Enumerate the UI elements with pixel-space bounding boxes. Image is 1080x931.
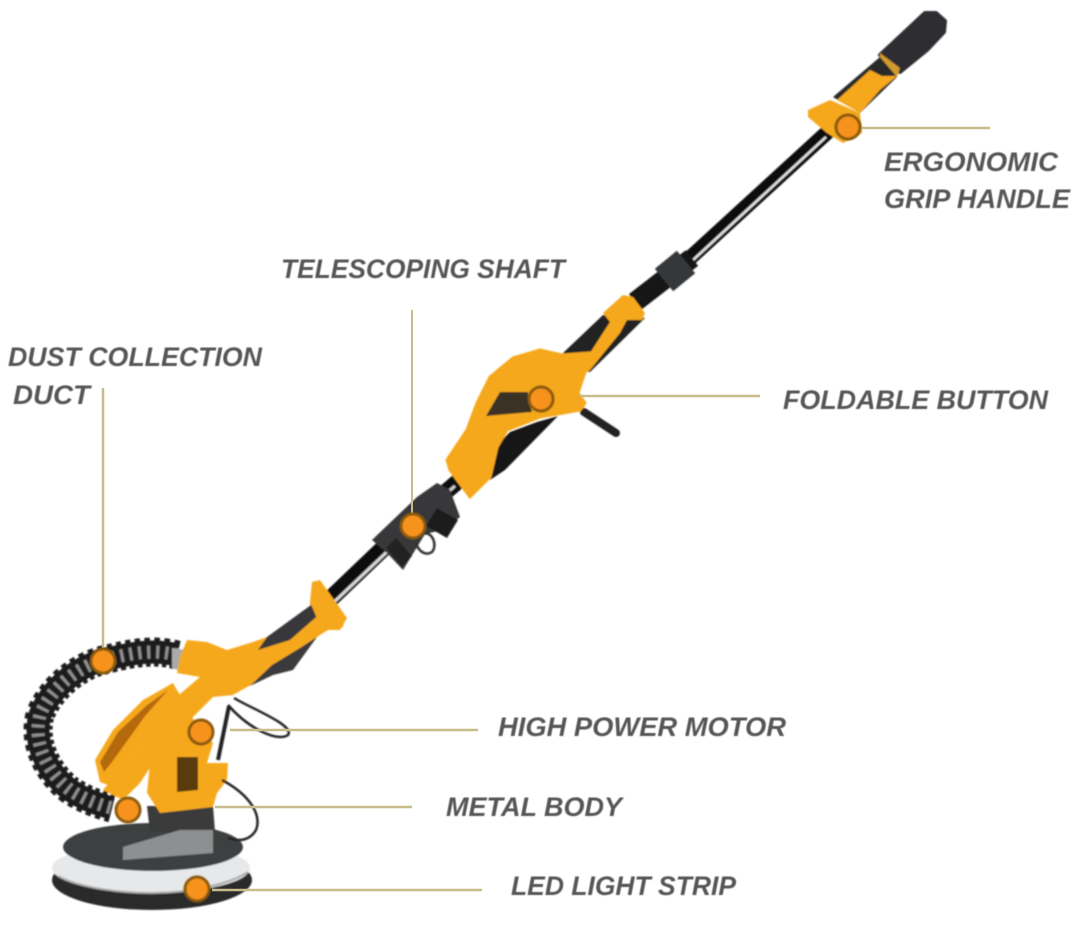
feature labels: ERGONOMIC [884,147,1059,177]
feature labels: HIGH POWER MOTOR [498,712,786,742]
folding joint housing [447,350,590,497]
feature labels: DUST COLLECTION [8,342,262,372]
sander disc [52,806,252,910]
lower telescoping shaft [325,416,558,604]
motor housing [147,715,228,813]
top end cap and rear grip [808,13,945,143]
feature labels: LED LIGHT STRIP [511,871,737,901]
feature labels: FOLDABLE BUTTON [783,385,1048,415]
folding lever [584,412,616,433]
telescoping clamp [372,483,460,570]
feature labels: GRIP HANDLE [884,184,1071,214]
callout markers [91,115,860,901]
upper telescoping shaft [635,128,832,302]
feature labels: METAL BODY [446,792,625,822]
dust hose [38,648,186,808]
middle grip and collar [563,295,645,377]
lower handle and arm [95,580,347,800]
feature labels: TELESCOPING SHAFT [281,254,567,284]
leader lines [103,128,990,890]
feature labels: DUCT [13,380,93,410]
feature labels [8,147,1071,901]
power cords [218,698,289,840]
